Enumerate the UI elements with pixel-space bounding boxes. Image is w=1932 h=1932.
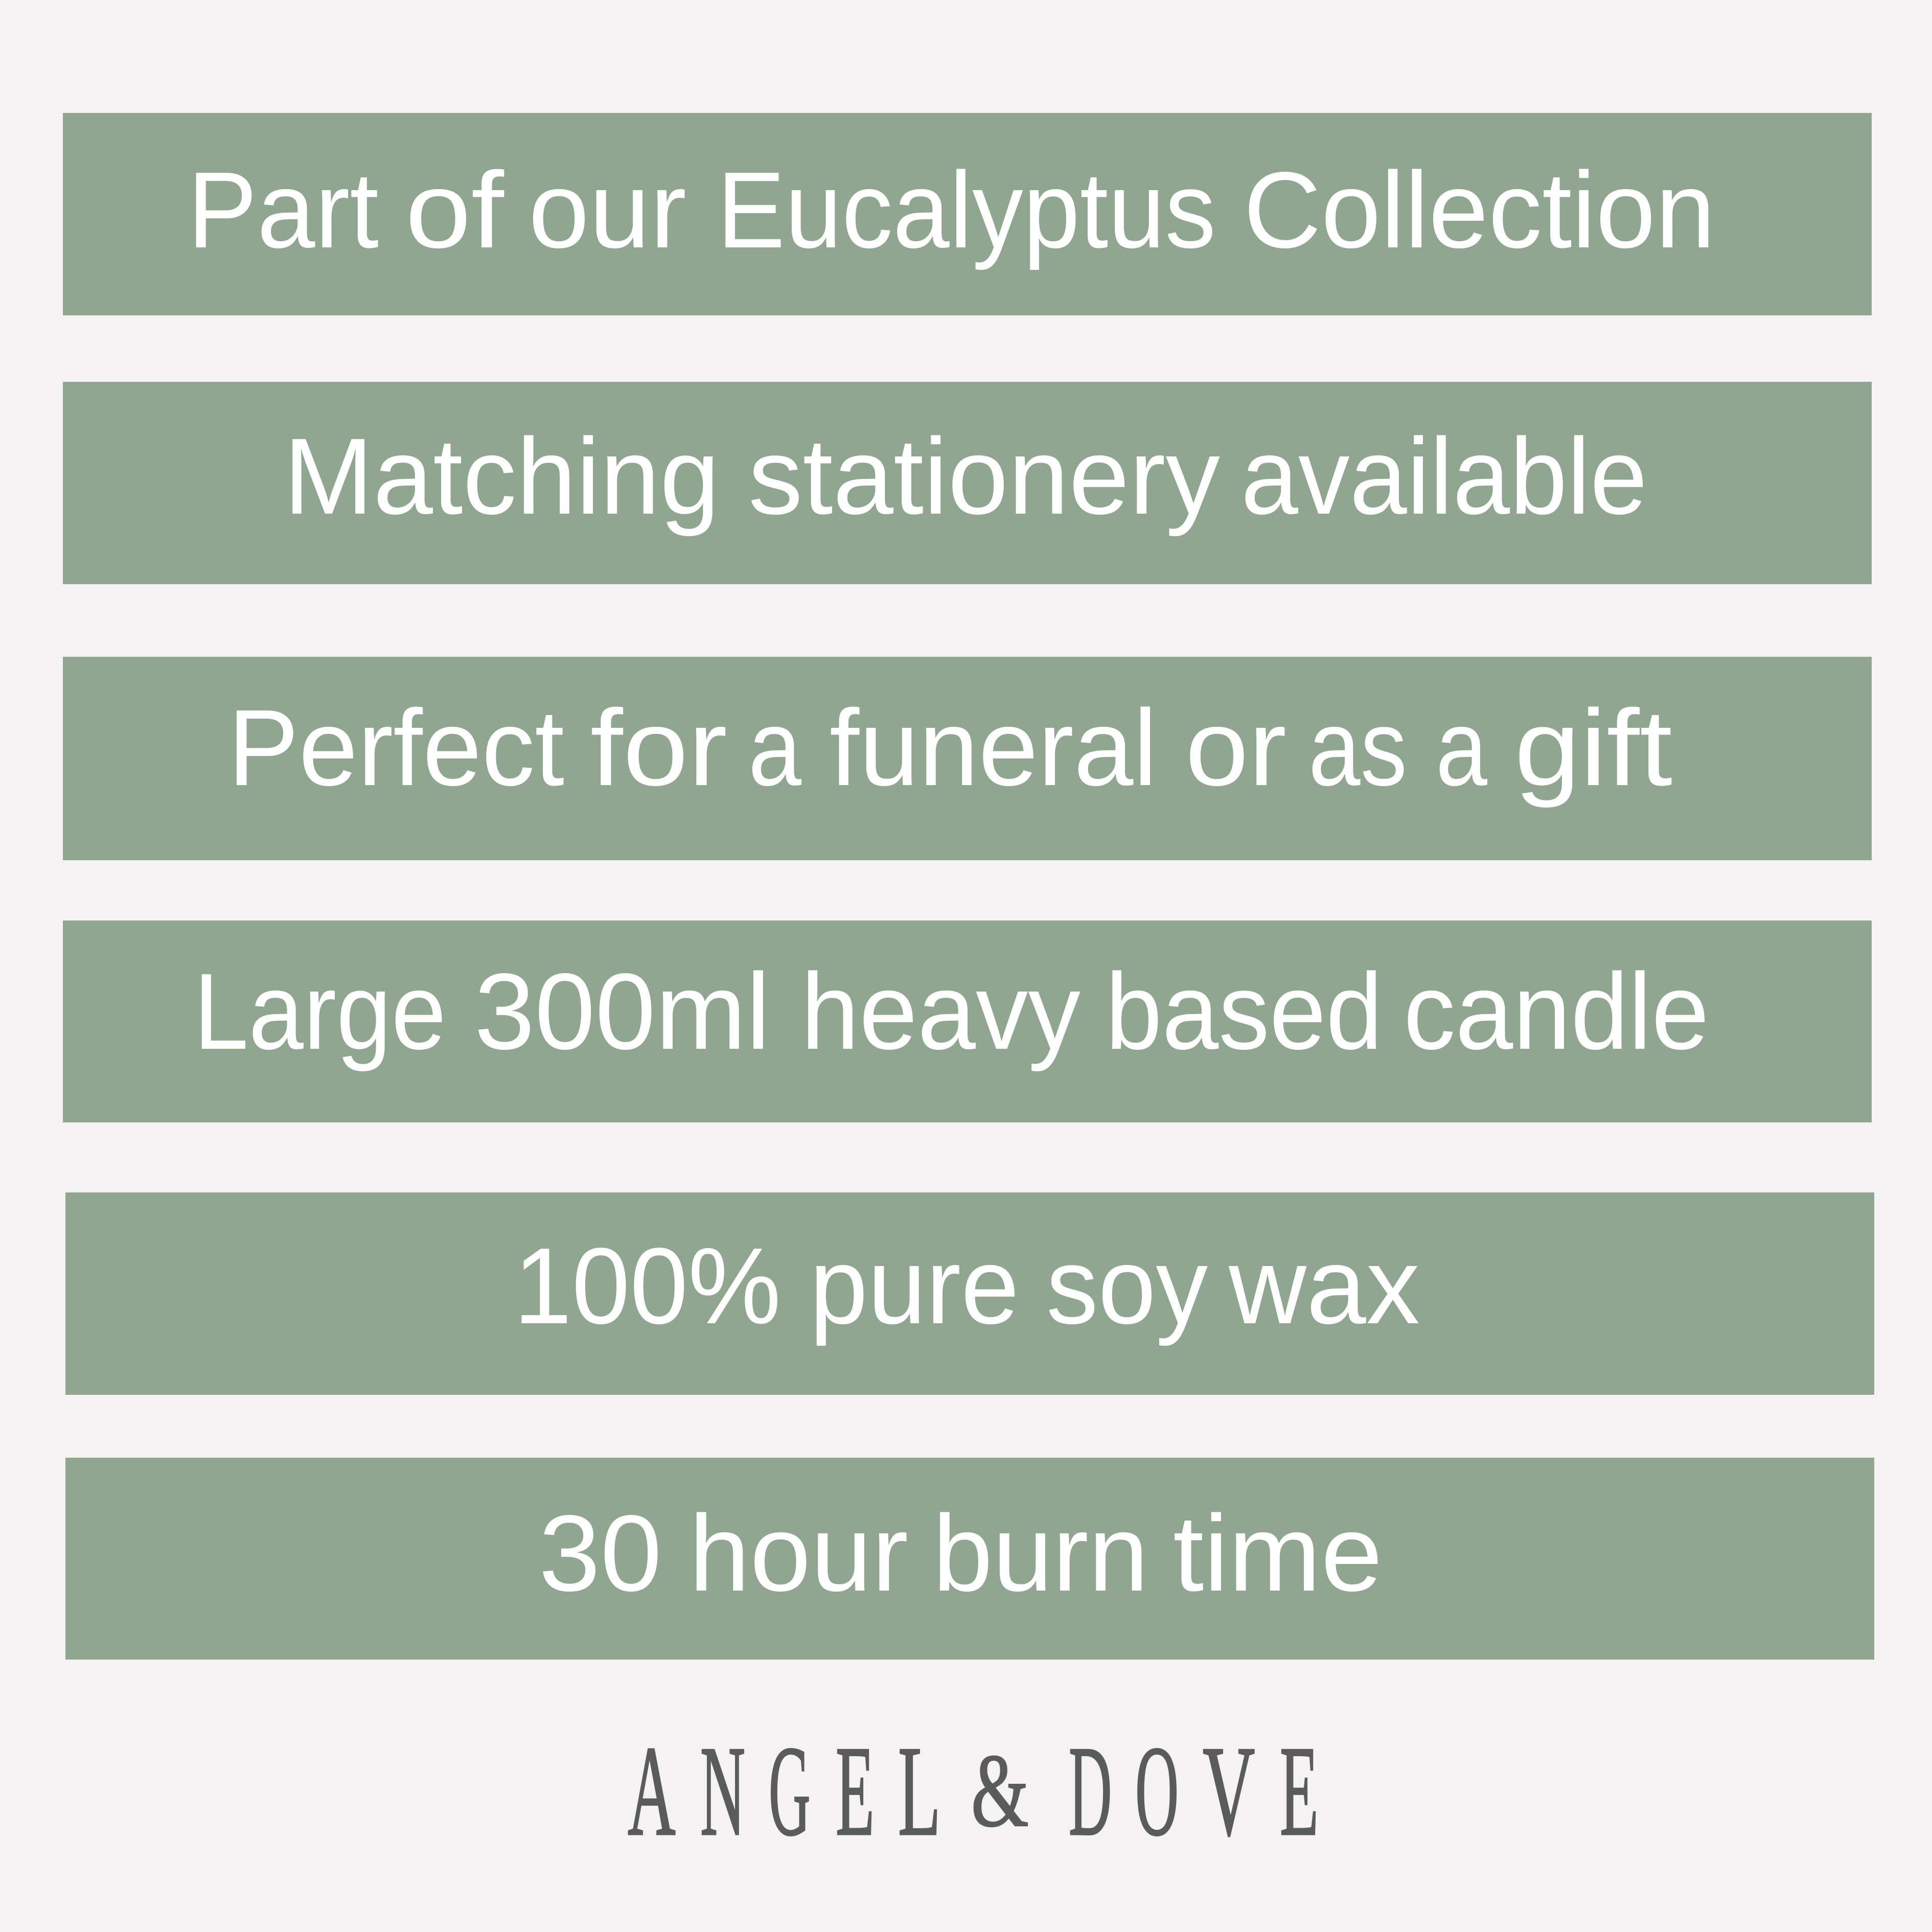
text: occasion: or bbox=[1185, 687, 1286, 808]
bar background bbox=[65, 1458, 1874, 1660]
text: size: heavy bbox=[801, 951, 1080, 1072]
text: burn time: time bbox=[1173, 1492, 1383, 1614]
logo: Angel & Dove: & bbox=[971, 1733, 1029, 1849]
text: collection: our bbox=[528, 149, 686, 270]
panel: stationery feature bbox=[63, 382, 1872, 584]
panel: occasion feature bbox=[63, 657, 1872, 860]
bar background bbox=[65, 1192, 1874, 1395]
text: wax: wax bbox=[1228, 1225, 1420, 1346]
logo: Angel & Dove: O bbox=[1135, 1719, 1179, 1862]
panel: wax feature bbox=[65, 1192, 1874, 1395]
text: size: based bbox=[1106, 951, 1383, 1072]
text: stationery: available bbox=[1241, 416, 1647, 537]
logo: Angel & Dove: E bbox=[836, 1719, 875, 1863]
text: burn time: 30 bbox=[539, 1492, 662, 1614]
text: occasion: a bbox=[748, 687, 801, 808]
text: collection: Eucalyptus bbox=[717, 149, 1216, 270]
logo: Angel & Dove bbox=[628, 1719, 1319, 1863]
text: occasion: gift bbox=[1514, 687, 1672, 808]
logo: Angel & Dove: N bbox=[700, 1719, 745, 1862]
logo: Angel & Dove: D bbox=[1069, 1719, 1112, 1862]
text: size: candle bbox=[1404, 951, 1709, 1072]
text: collection: of bbox=[405, 149, 504, 270]
text: occasion: funeral bbox=[830, 687, 1157, 808]
bar background bbox=[63, 113, 1872, 315]
bar background bbox=[63, 382, 1872, 584]
text: occasion: as bbox=[1308, 687, 1407, 808]
text: occasion: for bbox=[590, 687, 727, 808]
text: stationery: stationery bbox=[748, 416, 1220, 537]
text: stationery: Matching bbox=[284, 416, 720, 537]
panel: burn time feature bbox=[65, 1458, 1874, 1660]
text: size: 300ml bbox=[474, 951, 770, 1072]
text: collection: Part bbox=[188, 149, 379, 270]
logo: Angel & Dove: E bbox=[1280, 1719, 1319, 1863]
text: wax: pure bbox=[810, 1225, 1019, 1346]
text: burn time: burn bbox=[933, 1492, 1148, 1614]
text: occasion: a bbox=[1436, 687, 1487, 808]
logo: Angel & Dove: L bbox=[898, 1720, 941, 1863]
bar background bbox=[63, 657, 1872, 860]
text: wax: 100% bbox=[514, 1225, 781, 1346]
text: wax: soy bbox=[1046, 1225, 1208, 1346]
logo: Angel & Dove: G bbox=[769, 1719, 811, 1863]
text: occasion: Perfect bbox=[228, 687, 564, 808]
bar background bbox=[63, 921, 1872, 1122]
text: burn time: hour bbox=[689, 1492, 908, 1614]
logo: Angel & Dove: A bbox=[628, 1719, 676, 1862]
panel: collection feature bbox=[63, 113, 1872, 315]
panel: size feature bbox=[63, 921, 1872, 1122]
logo: Angel & Dove: V bbox=[1203, 1720, 1255, 1862]
text: collection: Collection bbox=[1244, 149, 1715, 270]
text: size: Large bbox=[194, 951, 446, 1072]
